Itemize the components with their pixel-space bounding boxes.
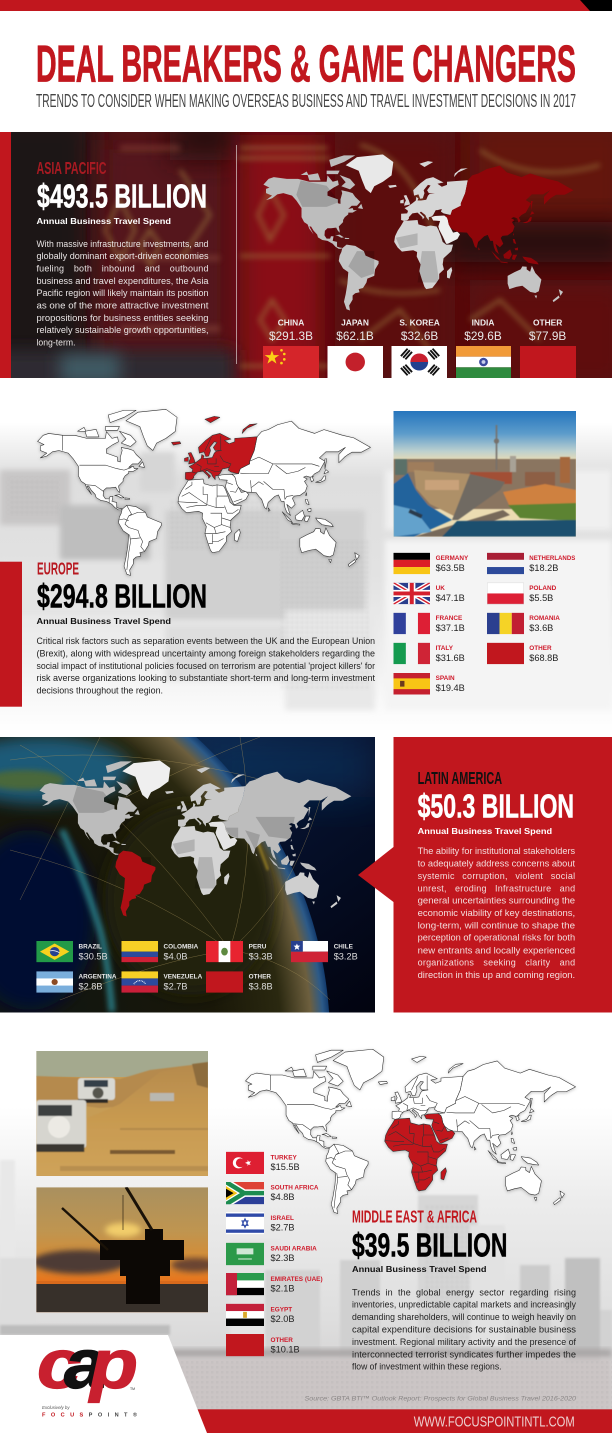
- paragraph: inventories, unpredictable capital markets and increasingly: [352, 1300, 576, 1310]
- country spend: other: $77.9B: [529, 329, 566, 343]
- paragraph: as one of the more attractive investment: [36, 300, 209, 310]
- country spend: turkey: TURKEY: [270, 1154, 298, 1161]
- country spend: venezuela: [121, 971, 203, 993]
- country spend: israel: ISRAEL: [270, 1215, 294, 1222]
- country spend: turkey: [226, 1152, 300, 1174]
- source note: Source: GBTA BTI™ Outlook Report: Prospects for Global Business Travel 2016-2020: [304, 1396, 576, 1403]
- country spend: other europe: [487, 643, 558, 664]
- paragraph: Critical risk factors such as separation events between the UK and the European Union: [36, 636, 375, 646]
- paragraph: globally dominant export-driven economies: [36, 251, 209, 261]
- country spend: italy: [394, 643, 465, 664]
- country spend: emirates: $2.1B: [270, 1284, 295, 1294]
- photo: desert vehicles: [36, 1051, 208, 1176]
- footer bar: [190, 1409, 612, 1433]
- country spend: poland: [487, 583, 557, 604]
- country spend: egypt: [226, 1304, 295, 1326]
- paragraph: [418, 846, 576, 980]
- country spend: venezuela: $2.7B: [164, 981, 188, 991]
- country spend: germany: $63.5B: [436, 563, 465, 573]
- country spend: netherlands: [487, 553, 576, 574]
- country spend: other europe: OTHER: [529, 645, 552, 652]
- country spend: poland: $5.5B: [529, 593, 553, 603]
- divider: [235, 145, 238, 364]
- country spend: peru: $3.3B: [249, 951, 273, 961]
- country spend: netherlands: NETHERLANDS: [529, 555, 576, 562]
- country spend: south korea: [392, 318, 447, 378]
- country spend: romania: $3.6B: [529, 623, 553, 633]
- country spend: japan: JAPAN: [341, 318, 369, 328]
- country spend: other latin america: [206, 971, 273, 993]
- country spend: india: INDIA: [472, 318, 494, 328]
- amount: $294.8 BILLION: [37, 578, 207, 614]
- country spend: saudi arabia: SAUDI ARABIA: [270, 1246, 317, 1252]
- paragraph: to adequately address concerns about: [418, 859, 576, 869]
- country spend: china: [263, 318, 319, 378]
- vehicles: [36, 1078, 115, 1152]
- country spend: brazil: BRAZIL: [78, 943, 102, 950]
- paragraph: organizations seeking clarity and: [418, 958, 575, 968]
- country spend: other europe: $68.8B: [529, 653, 558, 663]
- paragraph: decisions throughout the region.: [36, 686, 163, 696]
- paragraph: (Brexit), along with widespread uncertainty among foreign stakeholders regarding the: [36, 649, 375, 659]
- faded city background: [0, 436, 612, 712]
- paragraph: economic viability of key destinations,: [418, 908, 575, 918]
- country spend: turkey: $15.5B: [270, 1162, 300, 1172]
- country spend: japan: [328, 318, 383, 378]
- country spend: egypt: EGYPT: [270, 1306, 292, 1314]
- logo: cap: a: [64, 1325, 106, 1403]
- paragraph: The ability for institutional stakeholders: [418, 846, 576, 856]
- country spend: other middle east: OTHER: [270, 1337, 293, 1344]
- paragraph: [352, 1288, 577, 1371]
- annual spend label: Annual Business Travel Spend: [36, 616, 171, 626]
- panel: latin america text: [358, 737, 612, 1012]
- paragraph: interconnected terrorist syndicates further impedes the: [352, 1349, 576, 1359]
- paragraph: [36, 239, 209, 348]
- country spend: spain: [394, 673, 465, 694]
- heading: europe: EUROPE: [37, 558, 79, 578]
- country spend: other: [520, 318, 576, 378]
- country spend: colombia: $4.0B: [164, 951, 188, 961]
- focuspoint: FOCUS POINT®: [42, 1412, 138, 1418]
- logo: cap: [37, 1325, 138, 1403]
- paragraph: demanding shareholders, will continue to weigh heavily on: [352, 1312, 576, 1322]
- country spend: emirates: [226, 1273, 323, 1295]
- world map: middle east and africa highlighted: [246, 1049, 576, 1214]
- country spend: other: OTHER: [533, 318, 562, 328]
- paragraph: relatively sustainable growth opportunities,: [36, 325, 208, 335]
- country spend: israel: [226, 1212, 295, 1234]
- paragraph: unrest, eroding Infrastructure and: [418, 883, 575, 893]
- country spend: egypt: $2.0B: [270, 1314, 295, 1324]
- country spend: other latin america: $3.8B: [249, 981, 273, 991]
- photo: offshore oil rig: [36, 1187, 208, 1312]
- country spend: peru: [206, 941, 273, 962]
- panel: europe: [0, 380, 612, 732]
- country spend: emirates: EMIRATES (UAE): [270, 1276, 323, 1283]
- country spend: netherlands: $18.2B: [529, 563, 558, 573]
- logo: cap: p: [88, 1325, 138, 1403]
- paragraph: systemic corruption, violent social: [418, 871, 575, 881]
- country spend: brazil: [36, 941, 108, 962]
- country spend: spain: $19.4B: [436, 683, 465, 693]
- country spend: saudi arabia: $2.3B: [270, 1253, 295, 1263]
- country spend: other middle east: $10.1B: [270, 1344, 300, 1354]
- panel background photo: [11, 132, 612, 378]
- red callout with arrow: [358, 737, 612, 1012]
- country spend: italy: $31.6B: [436, 653, 465, 663]
- globe background: [0, 737, 375, 1012]
- paragraph: [36, 636, 375, 696]
- paragraph: With massive infrastructure investments, and: [36, 239, 208, 249]
- paragraph: long-term.: [36, 338, 76, 348]
- country spend: south korea: $32.6B: [401, 329, 438, 343]
- logo: cap: c: [37, 1325, 81, 1403]
- paragraph: fueling both inbound and outbound: [36, 264, 208, 274]
- exclusively by: Exclusively by: [42, 1405, 70, 1410]
- country spend: india: $29.6B: [464, 329, 502, 343]
- amount: $493.5 BILLION: [37, 178, 207, 214]
- country spend: germany: [394, 553, 469, 574]
- country spend: uk: [394, 583, 465, 604]
- faded skyline background: [0, 1148, 612, 1410]
- amount: $39.5 BILLION: [352, 1227, 508, 1264]
- country spend: italy: ITALY: [436, 645, 454, 652]
- country spend: chile: [291, 941, 358, 962]
- country spend: china: CHINA: [278, 318, 304, 328]
- paragraph: risk averse organizations looking to substantiate short-term and long-term investment: [36, 673, 375, 683]
- annual spend label: Annual Business Travel Spend: [418, 826, 552, 836]
- country spend: china: $291.3B: [269, 329, 313, 343]
- world map: south america highlighted: [40, 760, 351, 917]
- country spend: colombia: [121, 941, 199, 962]
- paragraph: perception of operational risks for both: [418, 933, 575, 943]
- panel: latin america map image: [0, 630, 375, 1433]
- paragraph: capital expenditure decisions for sustainable business: [352, 1324, 577, 1334]
- country spend: romania: [487, 613, 560, 634]
- country spend: other middle east: [226, 1334, 300, 1356]
- country spend: peru: PERU: [249, 943, 267, 950]
- annual spend label: Annual Business Travel Spend: [352, 1264, 486, 1274]
- country spend: france: [394, 613, 465, 634]
- country spend: chile: CHILE: [334, 943, 354, 950]
- country spend: romania: ROMANIA: [529, 615, 560, 622]
- annual spend label: Annual Business Travel Spend: [36, 216, 171, 226]
- country spend: saudi arabia: [226, 1243, 317, 1265]
- country spend: germany: GERMANY: [436, 555, 469, 562]
- logo tm: TM: [130, 1387, 135, 1391]
- country spend: south korea: S. KOREA: [399, 318, 440, 328]
- country spend: south africa: [226, 1182, 319, 1204]
- logo panel: [0, 1325, 207, 1433]
- paragraph: flow of investment within these regions.: [352, 1361, 502, 1371]
- country spend: france: FRANCE: [436, 615, 463, 622]
- paragraph: propositions for business entities seeking: [36, 313, 208, 323]
- country spend: japan: $62.1B: [336, 329, 374, 343]
- heading: latin america: LATIN AMERICA: [418, 768, 502, 788]
- paragraph: Pacific region will likely maintain its position: [36, 288, 208, 298]
- photo: berlin skyline: [394, 411, 576, 537]
- country spend: argentina: ARGENTINA: [78, 974, 117, 981]
- red side block: [0, 562, 22, 707]
- country spend: south africa: SOUTH AFRICA: [270, 1185, 319, 1192]
- paragraph: direction in this up and coming region.: [418, 970, 575, 980]
- country spend: venezuela: VENEZUELA: [164, 974, 203, 981]
- paragraph: Trends in the global energy sector regarding rising: [352, 1288, 576, 1298]
- country spend: chile: $3.2B: [334, 951, 358, 961]
- top bar: [0, 0, 612, 11]
- country spend: argentina: [36, 971, 117, 993]
- heading: middle east and africa: MIDDLE EAST & AFRICA: [352, 1207, 477, 1227]
- country spend: india: [456, 318, 511, 378]
- heading: asia pacific: ASIA PACIFIC: [36, 158, 107, 178]
- paragraph: new entrants and locally experienced: [418, 945, 575, 955]
- country spend: argentina: $2.8B: [78, 981, 103, 991]
- paragraph: general uncertainties surrounding the: [418, 896, 575, 906]
- red side strip: [0, 132, 11, 378]
- country spend: uk: UK: [436, 585, 445, 592]
- country spend: brazil: $30.5B: [78, 951, 108, 961]
- country spend: poland: POLAND: [529, 585, 557, 592]
- paragraph: social impact of institutional policies focused on terrorism are potential 'project killers' for: [36, 661, 375, 671]
- country spend: south africa: $4.8B: [270, 1192, 295, 1202]
- world map: asia highlighted: [263, 154, 573, 311]
- country spend: other latin america: OTHER: [249, 974, 271, 981]
- country spend: israel: $2.7B: [270, 1222, 295, 1232]
- country spend: spain: SPAIN: [436, 675, 455, 682]
- world map: europe highlighted: [38, 409, 371, 576]
- paragraph: business and travel expenditures, the Asia: [36, 276, 208, 286]
- country spend: uk: $47.1B: [436, 593, 465, 603]
- country spend: colombia: COLOMBIA: [164, 943, 199, 950]
- paragraph: long-term, will continue to shape the: [418, 920, 575, 930]
- country spend: france: $37.1B: [436, 623, 465, 633]
- panel: middle east and africa: [0, 1049, 612, 1433]
- panel: asia pacific: [0, 110, 612, 400]
- paragraph: investment. Regional military activity and the presence of: [352, 1337, 576, 1347]
